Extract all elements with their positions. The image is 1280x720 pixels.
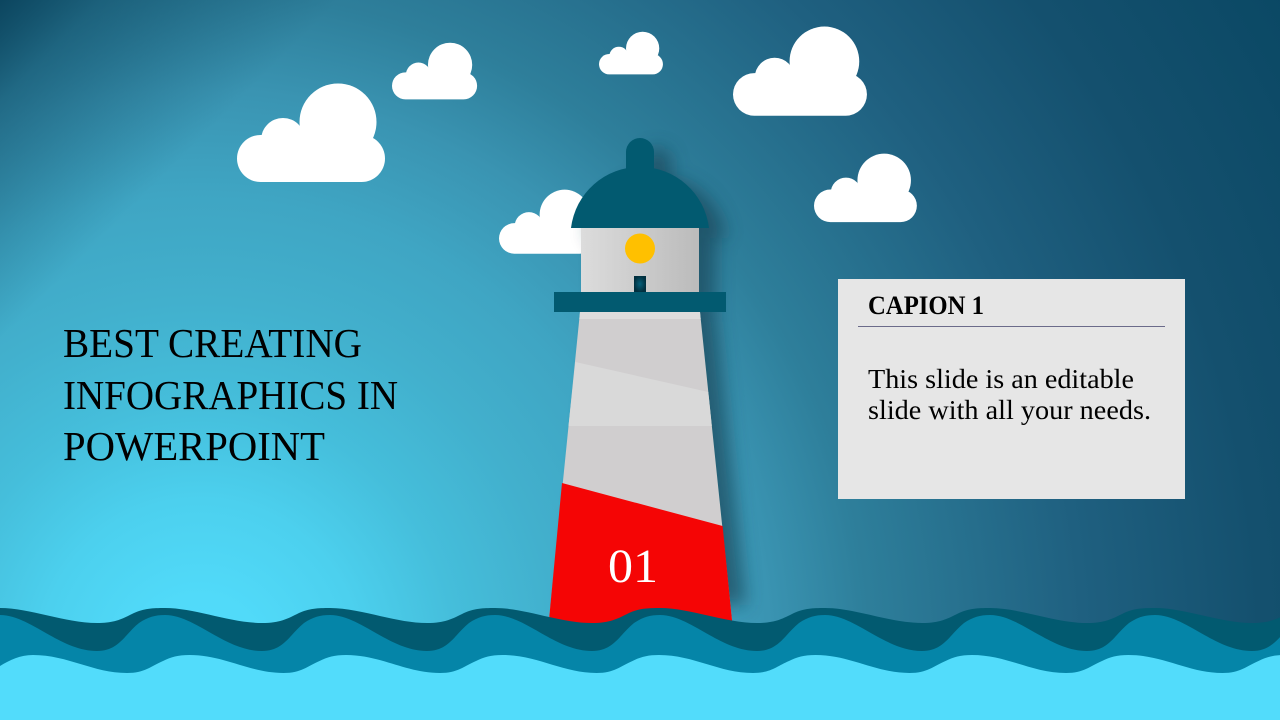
cloud: large left [237, 84, 385, 182]
wave: middle teal [0, 615, 1280, 720]
title: BEST CREATING [63, 320, 362, 366]
cloud: behind lighthouse [499, 190, 595, 254]
wave: back dark [0, 608, 1280, 720]
cloud: top right large [733, 27, 867, 116]
title [63, 320, 398, 469]
caption body text [868, 364, 1151, 425]
door [634, 276, 646, 292]
red band [548, 483, 732, 625]
dome roof [571, 138, 709, 228]
wave: front light [0, 655, 1280, 720]
band number: 01 [608, 540, 658, 593]
title: POWERPOINT [63, 423, 325, 469]
lantern room [581, 228, 699, 292]
cloud: upper left small [392, 43, 477, 99]
lighthouse [548, 138, 732, 625]
balcony [554, 292, 726, 312]
caption body text: slide with all your needs. [868, 395, 1151, 425]
panel: caption 1 [838, 279, 1185, 499]
lighthouse shadow [568, 148, 746, 605]
lamp [625, 234, 655, 264]
lighthouse tower body [548, 312, 732, 625]
title: INFOGRAPHICS IN [63, 372, 398, 418]
caption heading: CAPION 1 [868, 291, 984, 320]
caption body text: This slide is an editable [868, 364, 1134, 394]
cloud: right medium [814, 154, 917, 222]
cloud: top centre tiny [599, 32, 663, 74]
